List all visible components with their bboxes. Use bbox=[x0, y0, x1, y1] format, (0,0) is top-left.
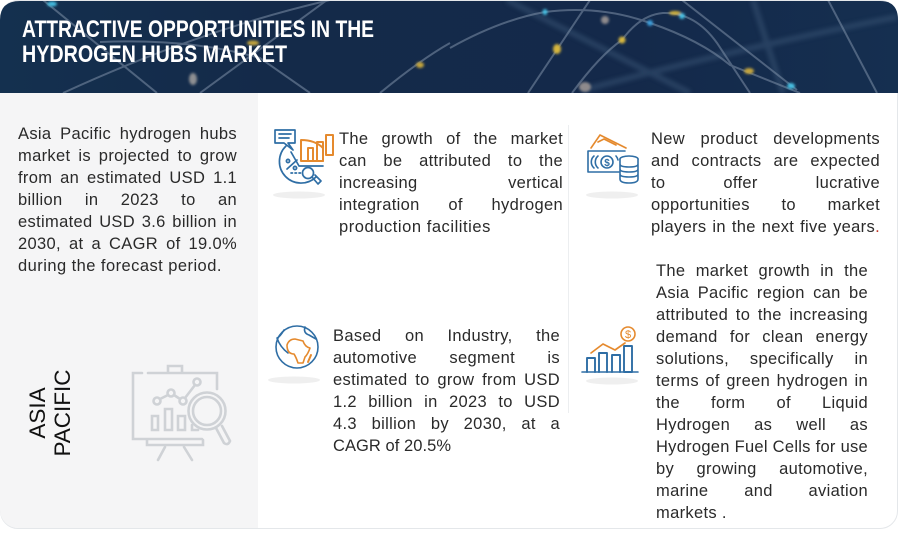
text: regional growth: Hydrogen Fuel Cells for use bbox=[656, 438, 868, 456]
text: regional growth: demand for clean energy bbox=[656, 328, 868, 346]
text: regional growth: terms of green hydrogen in bbox=[656, 372, 868, 390]
text: product developments: opportunities to market bbox=[651, 196, 880, 214]
icon: money and coins: $ bbox=[604, 158, 610, 169]
text: product developments bbox=[651, 130, 880, 236]
text: product developments: to offer lucrative bbox=[651, 174, 880, 192]
text: vertical integration: can be attributed to the bbox=[339, 152, 563, 170]
text: regional growth bbox=[656, 262, 868, 522]
text: regional growth: by growing automotive, bbox=[656, 460, 868, 478]
text: regional growth: solutions, specifically in bbox=[656, 350, 868, 368]
summary text: estimated USD 3.6 billion in bbox=[18, 213, 237, 231]
text: vertical integration: production facilities bbox=[339, 218, 491, 236]
title bbox=[22, 16, 374, 68]
icon: growth bars bbox=[581, 326, 639, 384]
text: automotive segment: 4.3 billion by 2030, at a bbox=[333, 415, 560, 433]
text: regional growth: markets . bbox=[656, 504, 727, 522]
summary text: Asia Pacific hydrogen hubs bbox=[18, 125, 237, 143]
icon: growth bars: $ bbox=[625, 329, 631, 341]
icon: presentation board bbox=[132, 364, 232, 462]
icon: money and coins bbox=[586, 134, 639, 198]
text: automotive segment: automotive segment is bbox=[333, 349, 560, 367]
summary text: billion in 2023 to an bbox=[18, 191, 237, 209]
divider bbox=[568, 125, 569, 413]
summary text: from an estimated USD 1.1 bbox=[18, 169, 237, 187]
text: vertical integration: integration of hydrogen bbox=[339, 196, 563, 214]
icon: analysis chart bbox=[273, 129, 334, 198]
text: vertical integration bbox=[339, 130, 563, 236]
text: automotive segment: estimated to grow from USD bbox=[333, 371, 560, 389]
text: product developments: players in the next five years. bbox=[651, 218, 880, 236]
text: regional growth: the form of Liquid bbox=[656, 394, 868, 412]
panel: left summary bbox=[0, 93, 258, 528]
header banner bbox=[0, 1, 898, 93]
summary text bbox=[18, 125, 237, 275]
text: regional growth: Hydrogen as well as bbox=[656, 416, 868, 434]
region label: Asia Pacific bbox=[25, 369, 75, 457]
text: regional growth: attributed to the increasing bbox=[656, 306, 868, 324]
summary text: market is projected to grow bbox=[18, 147, 237, 165]
text: vertical integration: The growth of the market bbox=[339, 130, 563, 148]
text: automotive segment: 1.2 billion in 2023 to USD bbox=[333, 393, 560, 411]
region label: Asia Pacific: PACIFIC bbox=[50, 369, 75, 457]
text: product developments: and contracts are expected bbox=[651, 152, 880, 170]
text: regional growth: marine and aviation bbox=[656, 482, 868, 500]
summary text: 2030, at a CAGR of 19.0% bbox=[18, 235, 237, 253]
text: automotive segment: CAGR of 20.5% bbox=[333, 437, 451, 455]
text: automotive segment: Based on Industry, the bbox=[333, 327, 560, 345]
summary text: during the forecast period. bbox=[18, 257, 222, 275]
text: product developments: New product developments bbox=[651, 130, 880, 148]
title: ATTRACTIVE OPPORTUNITIES IN THE bbox=[22, 16, 374, 43]
icon: globe bbox=[268, 325, 320, 384]
text: vertical integration: increasing vertical bbox=[339, 174, 563, 192]
region label: Asia Pacific: ASIA bbox=[25, 387, 50, 439]
text: automotive segment bbox=[333, 327, 560, 455]
text: regional growth: The market growth in the bbox=[656, 262, 868, 280]
title: HYDROGEN HUBS MARKET bbox=[22, 41, 287, 68]
text: regional growth: Asia Pacific region can be bbox=[656, 284, 868, 302]
